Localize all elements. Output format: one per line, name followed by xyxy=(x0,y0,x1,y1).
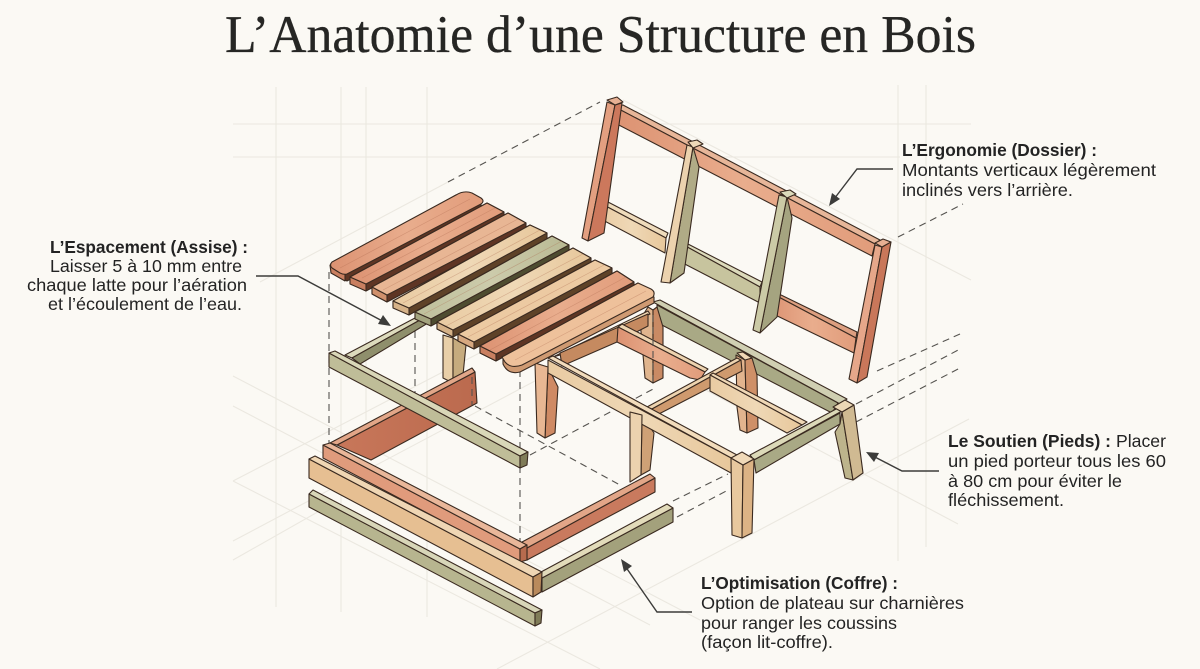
green loose rail xyxy=(329,351,528,468)
left post xyxy=(582,97,623,241)
middle post one xyxy=(661,140,703,283)
callout: L'Espacement: et l’écoulement de l’eau. xyxy=(48,294,242,314)
arrow: support callout xyxy=(866,452,939,471)
green front-right board xyxy=(541,504,673,592)
centre back leg xyxy=(736,352,758,433)
callout: Le Soutien: fléchissement. xyxy=(948,490,1064,510)
slat 7 xyxy=(458,260,612,349)
centre front leg xyxy=(630,412,642,482)
exploded-view dashed guide lines xyxy=(329,102,963,541)
left cross rail xyxy=(553,311,650,366)
green bottom rail xyxy=(309,490,542,626)
slat 3 xyxy=(372,213,526,302)
panel: backrest xyxy=(582,97,891,383)
front-left leg xyxy=(535,363,548,438)
panel: seat base frame xyxy=(345,300,863,538)
rear red board xyxy=(330,368,477,460)
right corner leg xyxy=(833,400,863,480)
slat 8 xyxy=(480,271,634,361)
upper backrest rail xyxy=(613,105,880,256)
panel: storage box parts xyxy=(309,351,673,626)
front corner leg xyxy=(731,452,754,538)
callout: L'Espacement: L’Espacement (Assise) : xyxy=(50,237,248,257)
callout: L'Optimisation: Option de plateau sur charnières xyxy=(701,593,964,613)
front rail xyxy=(548,356,737,473)
upper green seat rail xyxy=(345,318,428,364)
tan long board xyxy=(309,456,542,597)
front-left leg shaded face xyxy=(545,367,558,438)
arrow: spacing callout xyxy=(256,276,391,326)
right red board xyxy=(522,474,655,560)
lower rail right xyxy=(769,294,857,353)
back-left leg xyxy=(640,307,663,383)
callout: Le Soutien: un pied porteur tous les 60 xyxy=(948,451,1166,471)
right post xyxy=(849,239,891,383)
slat 5 green xyxy=(415,236,569,326)
callout: L'Ergonomie: Montants verticaux légèrement xyxy=(902,160,1156,180)
slat 9 xyxy=(502,283,654,373)
slat 4 xyxy=(393,225,547,315)
callout: Le Soutien xyxy=(948,431,1166,510)
callout: L'Optimisation: pour ranger les coussins xyxy=(701,613,897,633)
middle post two xyxy=(753,190,796,333)
long centre rail, back part xyxy=(617,324,708,380)
callout: L'Ergonomie xyxy=(902,140,1156,200)
callout: Le Soutien: Le Soutien (Pieds) : xyxy=(948,431,1111,451)
dashed guides drawn over the parts xyxy=(472,315,653,405)
green back rail xyxy=(653,300,847,413)
callout: L'Ergonomie: inclinés vers l’arrière. xyxy=(902,180,1073,200)
callout: L'Optimisation: (façon lit-coffre). xyxy=(701,632,833,652)
centre front leg shaded face xyxy=(641,415,654,475)
callout: L'Optimisation xyxy=(701,573,964,652)
front red board xyxy=(323,443,527,562)
callout: Le Soutien: à 80 cm pour éviter le xyxy=(948,471,1122,491)
callout: L'Espacement: chaque latte pour l’aération xyxy=(27,275,247,295)
slat 2 xyxy=(350,203,504,291)
callout: L'Ergonomie: L’Ergonomie (Dossier) : xyxy=(902,140,1097,160)
callout: L'Espacement: Laisser 5 à 10 mm entre xyxy=(50,256,242,276)
title: L’Anatomie d’une Structure en Bois xyxy=(225,6,976,64)
arrow: storage callout xyxy=(621,559,692,612)
lower rail left xyxy=(597,202,668,253)
under-seat leg xyxy=(443,335,466,383)
arrow: ergonomics callout xyxy=(829,169,893,206)
slat 1 xyxy=(330,192,483,281)
side rail right xyxy=(750,408,842,473)
panel: seat slats xyxy=(330,192,654,373)
callout: L'Espacement xyxy=(27,237,248,314)
lower rail middle xyxy=(677,243,762,303)
long centre rail, front part xyxy=(710,373,807,433)
callout: Le Soutien: Placer xyxy=(1116,431,1166,451)
middle cross rail xyxy=(647,358,742,416)
slat 6 xyxy=(437,248,591,337)
callout: L'Optimisation: L’Optimisation (Coffre) : xyxy=(701,573,898,593)
